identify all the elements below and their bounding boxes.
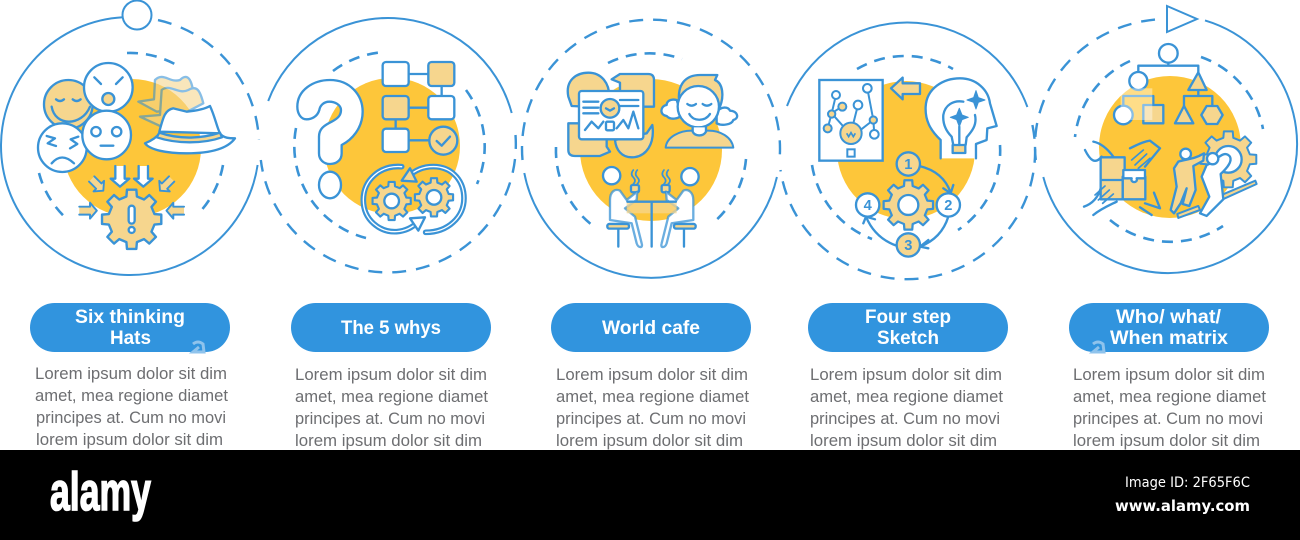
image id: Image ID: 2F65F6C bbox=[1125, 475, 1250, 491]
alamy logo: alamy bbox=[50, 462, 151, 522]
step 1 bbox=[897, 152, 920, 176]
icon: faces, hats and pressure gear bbox=[38, 63, 235, 249]
text block: column 1: principes at. Cum no movi bbox=[36, 408, 226, 427]
inner dashed ring 3 bbox=[556, 53, 746, 228]
icon: two workers bbox=[1171, 149, 1231, 216]
step 2: 2 bbox=[944, 198, 952, 214]
text block: column 1: Lorem ipsum dolor sit dim bbox=[35, 364, 227, 383]
outer ring 4 bbox=[780, 22, 1035, 279]
icon: speech bubbles, happy person and cafe table bbox=[568, 73, 737, 247]
icon: question mark, flowchart and gears bbox=[297, 62, 464, 232]
label pill: six thinking hats: Hats bbox=[110, 327, 151, 349]
panel: who what when matrix circle bbox=[1035, 6, 1297, 273]
text block: column 3 bbox=[556, 365, 749, 450]
label pill: world cafe: World cafe bbox=[602, 317, 700, 339]
label pill: four step sketch bbox=[808, 303, 1008, 352]
step 3: 3 bbox=[904, 238, 912, 254]
label pill: four step sketch: Four step bbox=[865, 306, 951, 328]
label pill: six thinking hats bbox=[30, 303, 230, 352]
text block: column 3: Lorem ipsum dolor sit dim bbox=[556, 365, 748, 384]
icon: question mark bbox=[297, 80, 363, 198]
text block: column 4: principes at. Cum no movi bbox=[810, 409, 1000, 428]
outer ring 5 bbox=[1035, 20, 1297, 273]
text block: column 5: amet, mea regione diamet bbox=[1073, 387, 1266, 406]
icon: idea board bbox=[579, 91, 643, 139]
inner dashed ring 2 bbox=[294, 52, 485, 238]
text block: column 2: Lorem ipsum dolor sit dim bbox=[295, 365, 487, 384]
label pill: who what when matrix: When matrix bbox=[1110, 327, 1228, 349]
panel: the 5 whys circle bbox=[261, 18, 516, 272]
icon: central gear bbox=[884, 180, 933, 230]
outer ring 1 bbox=[1, 17, 259, 275]
yellow disc 1 bbox=[63, 79, 201, 217]
label pill: world cafe bbox=[551, 303, 751, 352]
panel: six thinking hats circle bbox=[1, 0, 259, 275]
icon: people at cafe table bbox=[603, 167, 699, 247]
label pill: who what when matrix: Who/ what/ bbox=[1116, 306, 1222, 328]
icon: sketch board bbox=[819, 80, 883, 161]
text block: column 2: amet, mea regione diamet bbox=[295, 387, 488, 406]
text block: column 4 bbox=[810, 365, 1003, 450]
panel: world cafe circle bbox=[522, 20, 780, 278]
text block: column 4: Lorem ipsum dolor sit dim bbox=[810, 365, 1002, 384]
text block: column 4: lorem ipsum dolor sit dim bbox=[810, 431, 997, 450]
inner dashed ring 1 bbox=[39, 53, 223, 220]
text block: column 5: lorem ipsum dolor sit dim bbox=[1073, 431, 1260, 450]
icon: org chart, puzzle hands and workers with gear bbox=[1084, 44, 1257, 218]
yellow disc 4 bbox=[837, 81, 975, 219]
text block: column 3: amet, mea regione diamet bbox=[556, 387, 749, 406]
icon: main hat bbox=[145, 106, 235, 153]
text block: column 1: lorem ipsum dolor sit dim bbox=[36, 430, 223, 449]
text block: column 5: principes at. Cum no movi bbox=[1073, 409, 1263, 428]
end marker triangle bbox=[1167, 6, 1197, 32]
icon: happy person with clouds bbox=[661, 75, 737, 148]
icon: cycle arrows bbox=[363, 167, 464, 232]
label pill: the 5 whys bbox=[291, 303, 491, 352]
yellow disc 2 bbox=[324, 78, 460, 214]
yellow disc 5 bbox=[1099, 76, 1241, 218]
icon: flowchart bbox=[383, 62, 457, 155]
panel: four step sketch circle bbox=[780, 22, 1035, 279]
inner dashed ring 4 bbox=[812, 56, 1000, 239]
icon: org chart bbox=[1114, 44, 1223, 124]
outer ring 3 bbox=[522, 20, 780, 278]
yellow disc 3 bbox=[580, 79, 722, 221]
icon: neutral face bbox=[82, 111, 131, 159]
text block: column 2: principes at. Cum no movi bbox=[295, 409, 485, 428]
icon: puzzle and hands bbox=[1084, 141, 1160, 215]
icon: sketch board, head with idea and four steps bbox=[819, 78, 997, 257]
icon: speech bubbles bbox=[568, 73, 654, 157]
icon: cycle arcs bbox=[863, 166, 953, 248]
icon: pressure arrows bbox=[79, 166, 184, 219]
text block: column 4: amet, mea regione diamet bbox=[810, 387, 1003, 406]
step 4: 4 bbox=[864, 198, 873, 214]
step 4 bbox=[856, 193, 879, 217]
icon: twin gears bbox=[373, 178, 453, 220]
step 1: 1 bbox=[904, 157, 912, 173]
text block: column 2 bbox=[295, 365, 488, 450]
label pill: six thinking hats: Six thinking bbox=[75, 306, 185, 328]
label pill: the 5 whys: The 5 whys bbox=[341, 317, 441, 339]
icon: upset face bbox=[38, 123, 87, 172]
icon: angry face bbox=[84, 63, 133, 112]
step 3 bbox=[897, 233, 920, 257]
text block: column 2: lorem ipsum dolor sit dim bbox=[295, 431, 482, 450]
label pill: who what when matrix bbox=[1069, 303, 1269, 352]
label pill: four step sketch: Sketch bbox=[877, 327, 939, 349]
start marker circle bbox=[122, 0, 152, 30]
icon: gear being lifted bbox=[1177, 131, 1257, 218]
icon: gear with exclamation mark bbox=[102, 190, 161, 249]
icon: head with light bulb bbox=[926, 78, 997, 158]
footer bar with stock credit bbox=[0, 450, 1300, 540]
outer ring 2 bbox=[261, 18, 516, 272]
text block: column 5: Lorem ipsum dolor sit dim bbox=[1073, 365, 1265, 384]
text block: column 5 bbox=[1073, 365, 1266, 450]
text block: column 1: amet, mea regione diamet bbox=[35, 386, 228, 405]
text block: column 1 bbox=[35, 364, 228, 449]
text block: column 3: lorem ipsum dolor sit dim bbox=[556, 431, 743, 450]
website: www.alamy.com bbox=[1115, 497, 1250, 515]
inner dashed ring 5 bbox=[1075, 57, 1263, 242]
step 2 bbox=[937, 193, 960, 217]
icon: back hats bbox=[138, 77, 203, 126]
arrow: idea to sketch bbox=[891, 78, 920, 99]
icon: calm face bbox=[44, 80, 93, 129]
text block: column 3: principes at. Cum no movi bbox=[556, 409, 746, 428]
